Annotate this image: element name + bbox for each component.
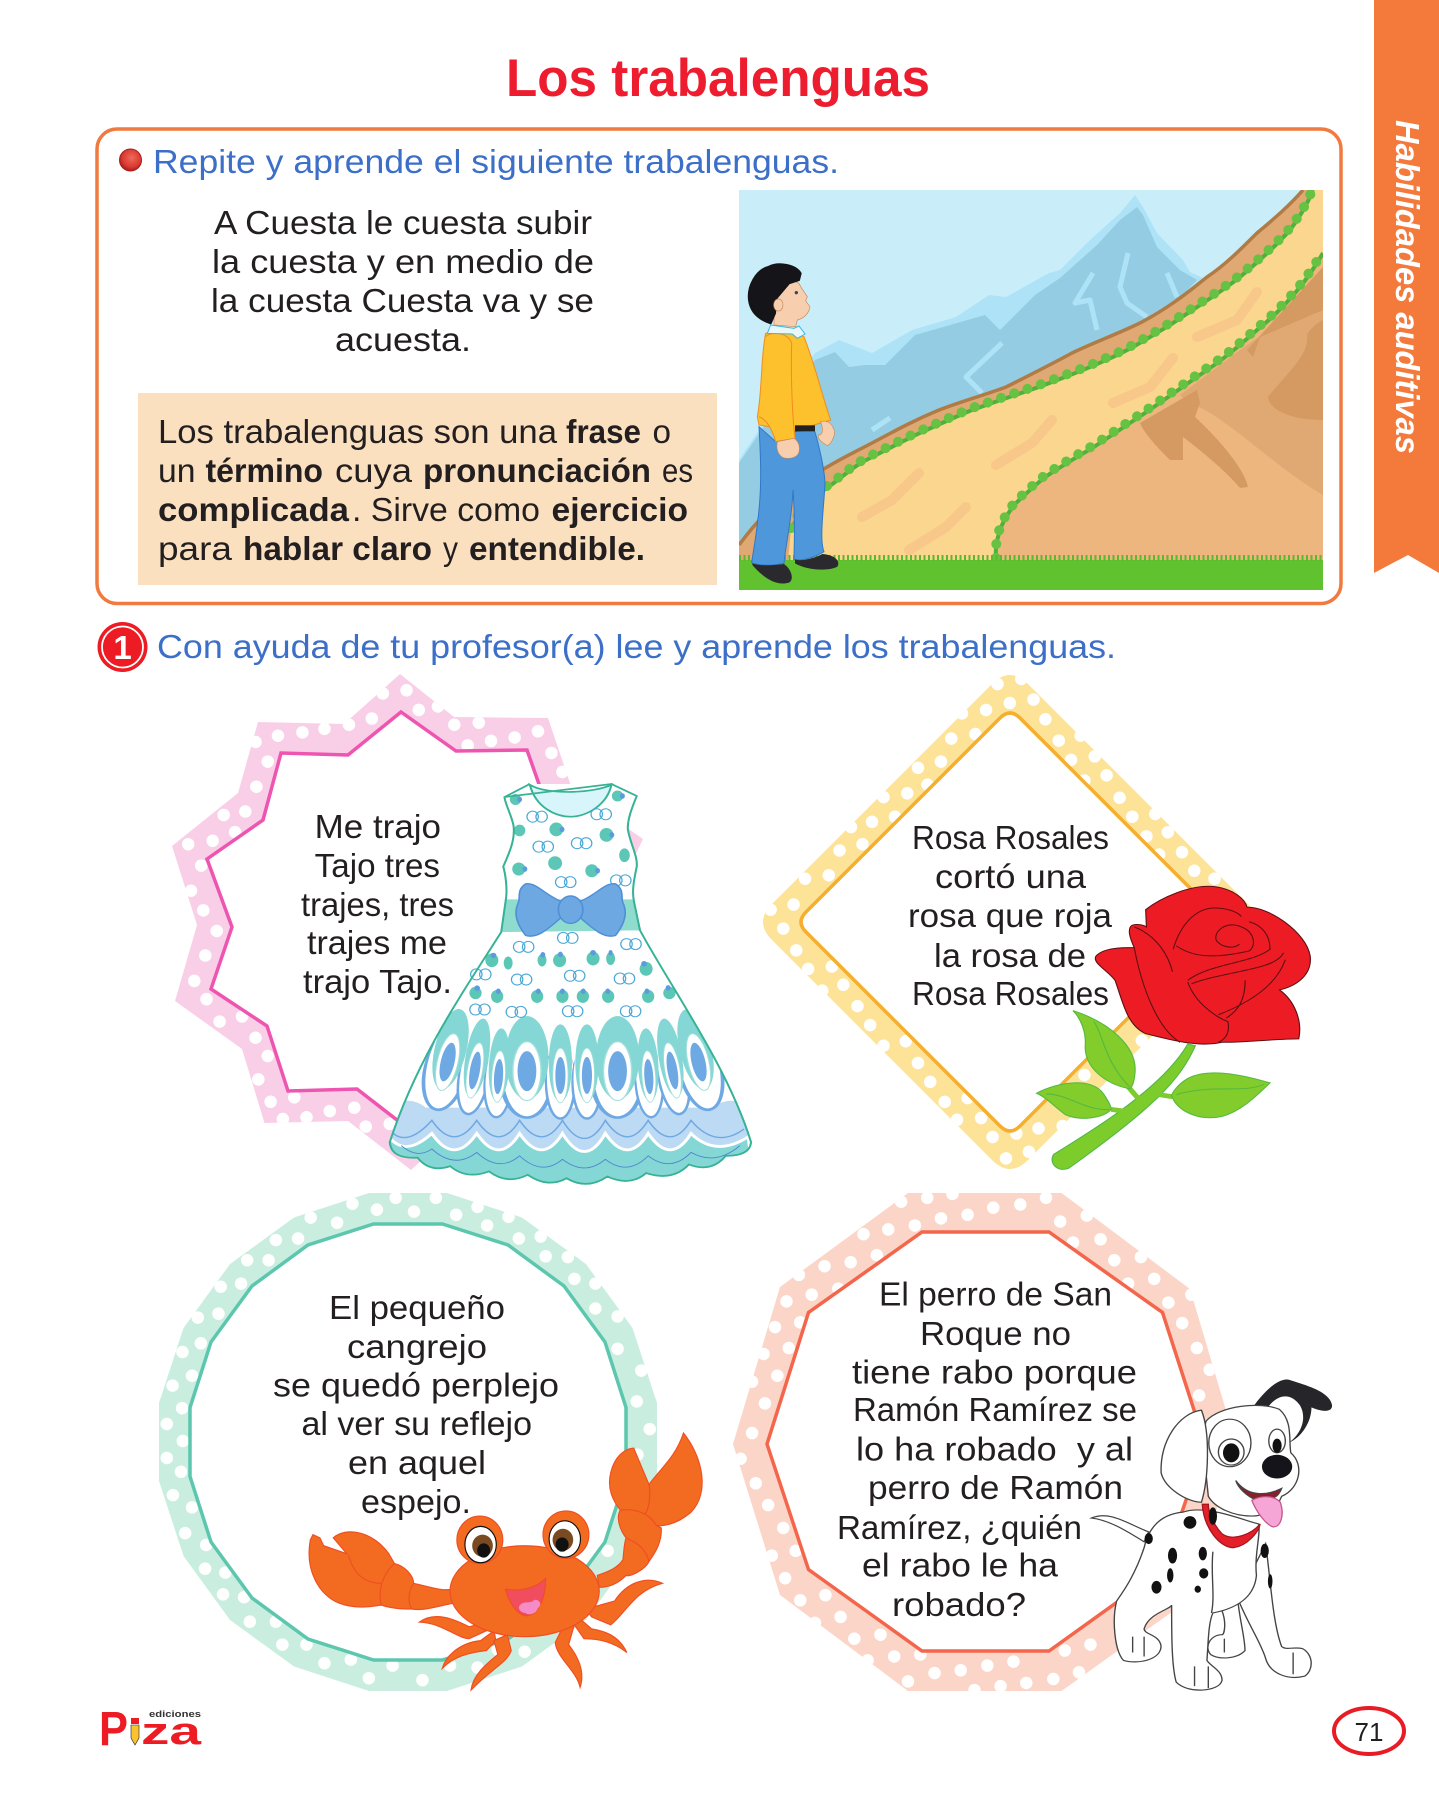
twister text: Me trajo — [315, 808, 441, 845]
twister text: El perro de San — [879, 1276, 1112, 1312]
twister text: tiene rabo porque — [852, 1354, 1137, 1390]
logo: Piza ediciones: za — [141, 1711, 202, 1753]
twister text — [301, 808, 454, 1000]
definition box: ejercicio — [552, 491, 688, 528]
panel: intro — [97, 129, 1341, 604]
definition box — [138, 393, 717, 585]
logo: Piza ediciones: ediciones — [149, 1709, 201, 1720]
tongue twister: A Cuesta: acuesta. — [335, 321, 471, 358]
twister text: robado? — [892, 1586, 1026, 1623]
tongue twister: A Cuesta — [211, 204, 594, 358]
definition box: frase — [566, 413, 641, 450]
step instruction: Con ayuda de tu profesor(a) lee y aprende los trabalenguas. — [157, 628, 1116, 665]
icon: pencil i — [131, 1718, 139, 1745]
twister text: lo ha robado y al — [856, 1430, 1133, 1468]
definition box: hablar claro — [243, 530, 432, 567]
panel: salmon decagon twister — [733, 1193, 1236, 1691]
twister text — [273, 1289, 559, 1520]
page number — [1334, 1708, 1404, 1754]
twister text: el rabo le ha — [862, 1546, 1059, 1584]
page number: 71 — [1355, 1717, 1383, 1747]
panel: pink star twister — [172, 674, 643, 1170]
twister text: Ramírez, ¿quién — [837, 1509, 1082, 1546]
twister text: en aquel — [348, 1444, 486, 1481]
panel: teal polygon twister — [159, 1193, 657, 1691]
definition box: cuya — [335, 452, 413, 489]
illustration: dress — [385, 784, 760, 1194]
title: Los trabalenguas — [506, 49, 930, 108]
twister text: cangrejo — [347, 1328, 487, 1365]
instruction heading: Repite y aprende el siguiente trabalenguas. — [153, 143, 839, 180]
twister text: trajo Tajo. — [303, 963, 452, 1000]
twister text: Tajo tres — [315, 847, 440, 884]
definition box: . Sirve como — [352, 491, 540, 528]
section ribbon: Habilidades auditivas: Habilidades auditivas — [1389, 120, 1426, 454]
twister text: rosa que roja — [908, 897, 1113, 934]
definition box: un — [158, 452, 196, 489]
twister text: perro de Ramón — [868, 1469, 1123, 1506]
definition box: es — [662, 452, 693, 489]
step number badge — [98, 622, 148, 672]
twister text: espejo. — [361, 1483, 471, 1520]
boy figure — [749, 264, 838, 584]
definition box: Los trabalenguas son una — [158, 413, 558, 450]
twister text: al ver su reflejo — [302, 1405, 532, 1442]
definition box: o — [652, 413, 671, 450]
twister text: trajes, tres — [301, 886, 454, 923]
twister text: trajes me — [307, 924, 447, 961]
logo: Piza ediciones: P — [99, 1703, 128, 1756]
step number badge: 1 — [113, 629, 132, 666]
definition box: pronunciación — [423, 452, 651, 489]
twister text: Rosa Rosales — [912, 819, 1109, 856]
twister text — [837, 1276, 1137, 1623]
panel: yellow diamond twister — [763, 675, 1257, 1169]
twister text — [908, 819, 1113, 1012]
illustration: dalmatian puppy — [1091, 1379, 1332, 1690]
illustration: boy looking at hill — [739, 188, 1323, 590]
twister text: Rosa Rosales — [912, 975, 1109, 1012]
twister text: la rosa de — [934, 937, 1086, 974]
twister text: cortó una — [935, 858, 1087, 895]
twister text: Ramón Ramírez se — [853, 1391, 1137, 1428]
tongue twister: A Cuesta: la cuesta Cuesta va y se — [211, 282, 594, 319]
illustration: red rose — [1037, 886, 1310, 1169]
tongue twister: A Cuesta: la cuesta y en medio de — [212, 243, 594, 280]
twister text: se quedó perplejo — [273, 1366, 559, 1404]
definition box: para — [158, 530, 233, 567]
section ribbon: Habilidades auditivas — [1374, 0, 1439, 573]
twister text: Roque no — [920, 1315, 1071, 1352]
definition box: término — [206, 452, 323, 489]
icon: red bullet — [120, 149, 142, 171]
definition box: complicada — [158, 491, 350, 528]
definition box: entendible. — [469, 530, 645, 567]
definition box: y — [443, 530, 458, 567]
illustration: crab — [309, 1433, 702, 1690]
twister text: El pequeño — [329, 1289, 505, 1326]
logo: Piza ediciones — [99, 1703, 202, 1756]
tongue twister: A Cuesta: A Cuesta le cuesta subir — [214, 204, 592, 241]
